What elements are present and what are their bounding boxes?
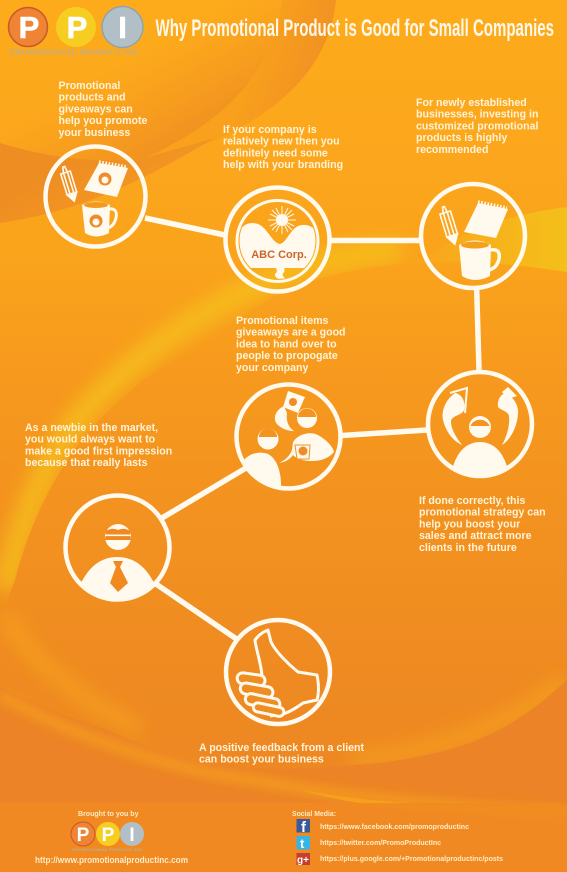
- step 6 ring: [66, 496, 170, 600]
- brought by label: Brought to you by: [78, 809, 139, 818]
- footer band: [0, 803, 567, 872]
- text: step 3: businesses, investing in: [416, 109, 538, 121]
- text: step 4 (promotional items): Promotional items: [236, 315, 329, 327]
- connector lines: [145, 218, 479, 640]
- text: step 1: products and: [58, 92, 126, 104]
- step 6: businessman: [66, 496, 170, 610]
- twitter link: https://twitter.com/PromoProductInc: [320, 838, 441, 847]
- icon: twitter: t: [300, 836, 305, 851]
- text: promotional strategy: help you boost your: [419, 518, 520, 530]
- text: step 4 (promotional items): giveaways are a good: [236, 327, 346, 339]
- text: promotional strategy: sales and attract more: [419, 530, 532, 542]
- text: step 3: customized promotional: [416, 120, 538, 132]
- text: step 4 (promotional items): idea to hand over to: [236, 338, 337, 350]
- footer logo: P: [77, 825, 90, 846]
- icon: mug: [459, 240, 499, 280]
- text: step 1: giveaways can: [58, 103, 133, 115]
- footer: brought to you by: [35, 809, 188, 865]
- icon: twitter: [296, 836, 310, 851]
- step 7 ring: [226, 620, 330, 724]
- footer: social media: [292, 809, 503, 866]
- text: step 3: recommended: [416, 144, 488, 156]
- icon: cheering person: [442, 387, 518, 480]
- header logo: [8, 6, 143, 56]
- text: promotional strategy: If done correctly, this: [419, 495, 525, 507]
- header logo: P: [19, 10, 39, 45]
- footer logo: [71, 822, 144, 852]
- footer logo: I: [129, 825, 135, 846]
- text: newbie in the market: make a good first impression: [25, 445, 172, 457]
- icon: mug: [82, 202, 116, 236]
- step 1: promotional products: [46, 146, 146, 246]
- footer logo: P: [102, 825, 115, 846]
- text: promotional strategy: promotional strategy can: [419, 507, 546, 519]
- header logo: PROMOTIONAL PRODUCT INC: [10, 48, 140, 56]
- icon: thumbs up: [236, 630, 318, 717]
- icon: pen: [438, 205, 460, 246]
- step 3 ring: [421, 184, 525, 288]
- icon: man with sunglasses and tie: [82, 524, 154, 598]
- text: step 1: Promotional: [58, 80, 120, 92]
- step 2 outer ring: [226, 188, 330, 292]
- text: step 2: help with your branding: [223, 159, 343, 171]
- step 2 inner ring: [237, 200, 318, 282]
- icon: ABC Corp logo: ABC Corp.: [251, 249, 307, 261]
- social label: Social Media:: [292, 809, 336, 818]
- text: step 2: definitely need some: [223, 147, 328, 159]
- icon: pen: [59, 165, 79, 203]
- icon: notepad: [464, 202, 508, 238]
- facebook link: https://www.facebook.com/promoproductinc: [320, 822, 469, 831]
- text: newbie in the market: because that really lasts: [25, 457, 148, 469]
- text: positive feedback: can boost your business: [199, 754, 324, 766]
- step 5 ring: [236, 384, 340, 488]
- text: promotional strategy: clients in the future: [419, 542, 517, 554]
- step 7: thumbs up: [226, 620, 330, 724]
- text: step 1: help you promote: [58, 115, 147, 127]
- text: step 4 (promotional items): people to propogate: [236, 350, 338, 362]
- text: step 3: products is highly: [416, 132, 507, 144]
- text: step 4 (promotional items): your company: [236, 362, 309, 374]
- text: step 3: For newly established: [416, 97, 527, 109]
- icon: google plus: g+: [297, 855, 309, 866]
- text: step 2: If your company is: [223, 124, 317, 136]
- footer logo: PROMOTIONAL PRODUCT INC: [72, 847, 142, 852]
- step 5: giveaways among people: [235, 384, 340, 500]
- text: step 2: relatively new then you: [223, 136, 340, 148]
- text: positive feedback: A positive feedback from a client: [199, 742, 365, 754]
- icon: facebook: f: [301, 819, 307, 836]
- header logo: I: [118, 10, 127, 45]
- text: step 1: your business: [58, 127, 130, 139]
- step 2: branding: [226, 188, 330, 292]
- icon: people sharing items: [244, 391, 334, 486]
- header logo: P: [67, 10, 87, 45]
- step 4: happy person with raised arms: [428, 372, 532, 480]
- step 1 ring: [46, 146, 146, 246]
- step 3: customized items: [421, 184, 525, 288]
- website url: http://www.promotionalproductinc.com: [35, 855, 188, 865]
- step 4 ring: [428, 372, 532, 476]
- google plus link: https://plus.google.com/+Promotionalproductinc/posts: [320, 854, 503, 863]
- icon: facebook: [296, 819, 310, 836]
- icon: notepad: [84, 162, 128, 197]
- text: newbie in the market: you would always want to: [25, 434, 156, 446]
- text: newbie in the market: As a newbie in the market,: [25, 422, 158, 434]
